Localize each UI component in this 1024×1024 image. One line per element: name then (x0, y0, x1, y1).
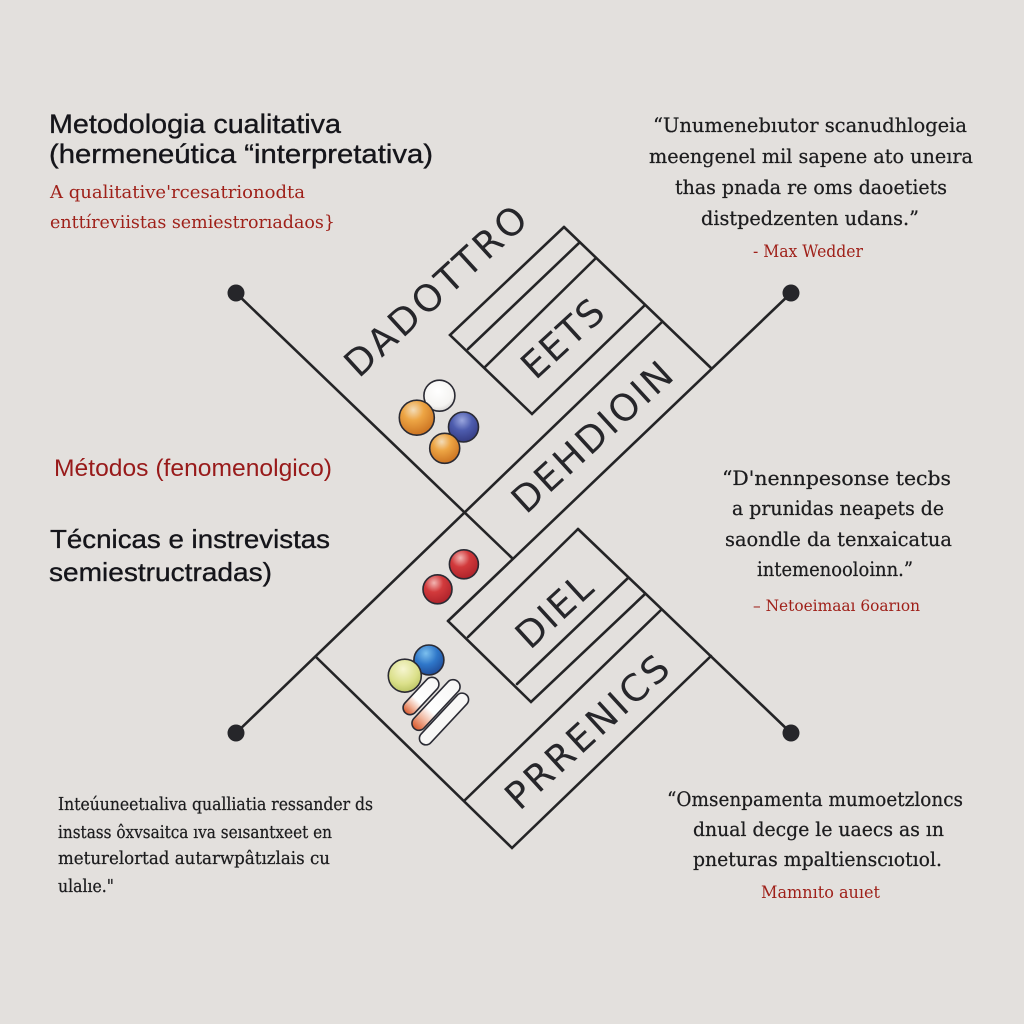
text block: bottom left: ulalıe." (58, 876, 114, 897)
icon: two red spheres (423, 550, 478, 604)
subheading: red research note (49, 182, 335, 233)
attribution: bottom right: Mamnıto auıet (761, 883, 880, 903)
heading: técnicas: semiestructradas) (49, 557, 272, 587)
subheading: red research note: enttíreviistas semiestrorıadaos} (50, 212, 335, 233)
endpoint dots (228, 284, 800, 742)
quote: top right: meengenel mil sapene ato uneıra (649, 144, 973, 168)
quote: bottom right: pneturas mpaltienscıotıol. (693, 847, 942, 871)
quote: top right: “Unumenebıutor scanudhlogeia (653, 113, 967, 137)
quote: middle right: saondle da tenxaicatua (725, 527, 952, 551)
heading: metodologia cualitativa (49, 109, 433, 169)
quote: middle right (722, 466, 952, 581)
diagram: crossing lines and bands (236, 227, 791, 848)
heading: metodologia cualitativa: Metodologia cualitativa (49, 109, 342, 139)
heading: metodologia cualitativa: (hermeneútica “interpretativa) (49, 139, 433, 169)
attribution: max wedder: - Max Wedder (753, 242, 864, 262)
band label: prrenics: PRRENICS (497, 647, 678, 818)
band label: dehdioin: DEHDIOIN (503, 353, 682, 522)
quote: bottom right: dnual decge le uaecs as ın (693, 817, 944, 841)
icon: four spheres (399, 380, 478, 463)
quote: top right: thas pnada re oms daoetiets (675, 175, 947, 199)
text block: bottom left: instass ôxvsaitca ıva seısantxeet en (58, 822, 332, 843)
subheading: red research note: A qualitative'rcesatrionodta (49, 182, 305, 203)
text block: bottom left: Inteúuneetıaliva qualliatia ressander ds (58, 794, 373, 815)
quote: top right (649, 113, 973, 230)
quote: middle right: a prunidas neapets de (732, 496, 944, 520)
quote: bottom right (667, 787, 963, 871)
heading: técnicas: Técnicas e instrevistas (50, 524, 330, 554)
quote: middle right: intemenooloinn.” (757, 557, 913, 581)
text block: bottom left: meturelortad autarwpâtızlais cu (58, 848, 330, 869)
heading: técnicas (49, 524, 330, 587)
band label: eets: EETS (513, 290, 613, 387)
text block: bottom left (58, 794, 373, 897)
quote: bottom right: “Omsenpamenta mumoetzloncs (667, 787, 963, 811)
band label: diel: DIEL (507, 565, 602, 657)
attribution: middle right: – Netoeimaaı 6oarıon (753, 596, 920, 615)
icon: spheres and capsules (388, 645, 471, 748)
quote: middle right: “D'nennpesonse tecbs (722, 466, 951, 490)
band label: dadottro: DADOTTRO (336, 197, 536, 386)
heading: métodos: Métodos (fenomenolgico) (54, 455, 332, 482)
quote: top right: distpedzenten udans.” (701, 206, 919, 230)
